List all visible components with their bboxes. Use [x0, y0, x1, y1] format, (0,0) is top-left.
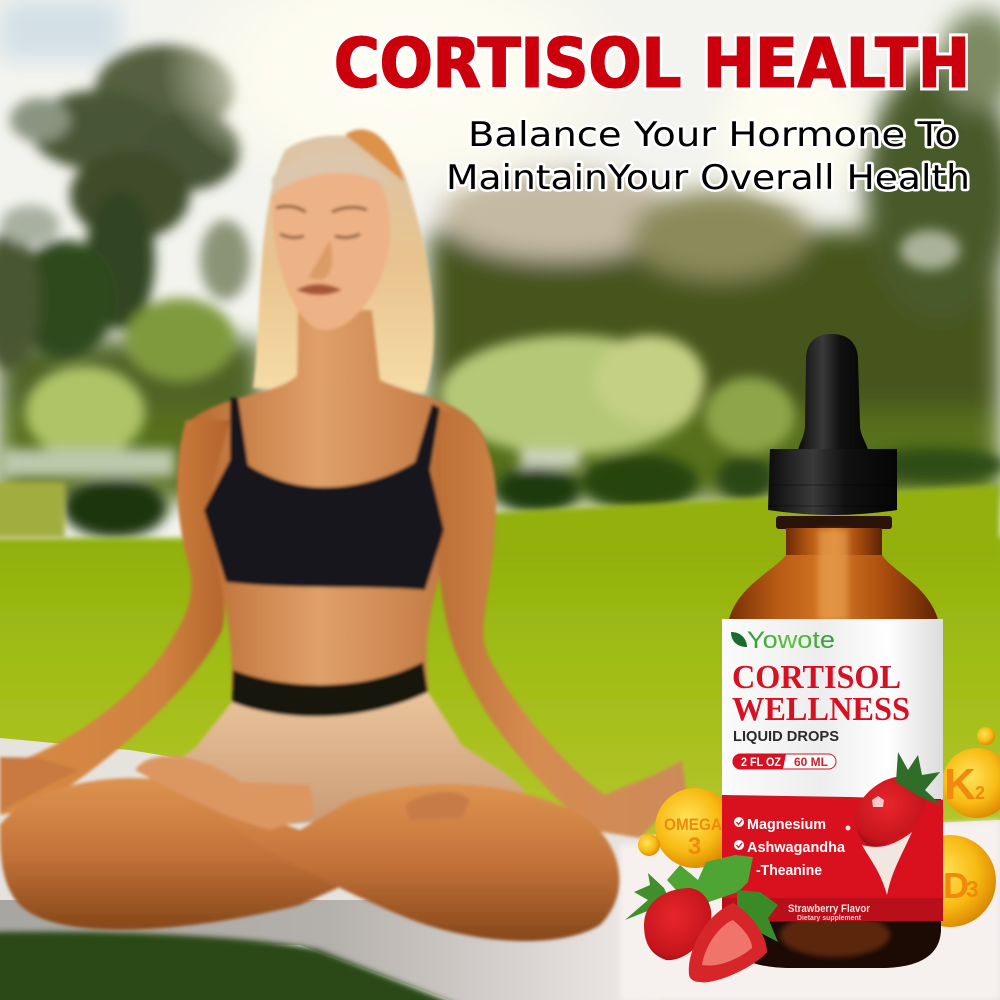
flavor text: Dietary supplement	[797, 915, 862, 922]
product name: CORTISOL	[732, 659, 901, 696]
brand logo: Yowote	[747, 627, 835, 654]
crossed legs	[0, 778, 355, 930]
subheading	[446, 115, 970, 198]
dropper bulb	[798, 334, 868, 450]
woman in yoga pose	[0, 129, 686, 941]
right arm	[432, 410, 686, 838]
waistband	[232, 662, 428, 718]
hair back	[253, 136, 434, 392]
front strawberries	[625, 855, 778, 982]
volume pill: 60 ML	[794, 755, 828, 769]
face	[272, 154, 390, 330]
bubble: K2: 2	[975, 783, 985, 803]
ingredient list: Magnesium	[747, 816, 826, 833]
subheading: Balance Your Hormone To	[468, 115, 958, 155]
torso	[180, 310, 487, 690]
black sports top	[204, 398, 444, 590]
label strawberry splash	[846, 752, 942, 895]
foot	[135, 756, 315, 830]
lower grass	[0, 932, 470, 1000]
ribbed cap	[768, 449, 897, 515]
product name: WELLNESS	[732, 691, 910, 728]
strawberry leaves	[625, 855, 778, 942]
bottle label white	[722, 619, 943, 799]
hand left	[0, 757, 78, 812]
bubble: omega 3	[638, 788, 735, 868]
whole strawberry	[644, 888, 711, 960]
flavor text	[788, 903, 871, 922]
bubble: D3: 3	[966, 876, 979, 902]
supplement bubbles	[638, 727, 1000, 927]
product name	[732, 659, 910, 728]
ingredient list: Ashwagandha	[747, 839, 846, 856]
glass body	[722, 555, 941, 968]
product bottle	[722, 334, 943, 968]
cut strawberry	[689, 903, 767, 982]
subheading: MaintainYour Overall Health	[446, 158, 970, 198]
bubble: K2: K	[944, 760, 976, 809]
bubble: D3	[904, 835, 996, 927]
volume pill: 2 FL OZ	[741, 755, 781, 769]
left arm	[0, 420, 230, 815]
bubble: K2	[942, 727, 1000, 818]
flavor text: Strawberry Flavor	[788, 903, 871, 915]
shorts	[150, 692, 525, 830]
bubble: D3: D	[943, 865, 969, 906]
neck	[776, 516, 892, 529]
ingredient list	[734, 816, 846, 879]
yoga mat	[0, 738, 1000, 1000]
bubble: omega 3: 3	[688, 833, 701, 860]
bubble: omega 3: OMEGA	[664, 815, 722, 834]
liquid drops: LIQUID DROPS	[733, 728, 839, 745]
bottle label red	[722, 795, 943, 922]
volume pill	[733, 754, 836, 769]
ingredient list: -Theanine	[756, 862, 822, 879]
